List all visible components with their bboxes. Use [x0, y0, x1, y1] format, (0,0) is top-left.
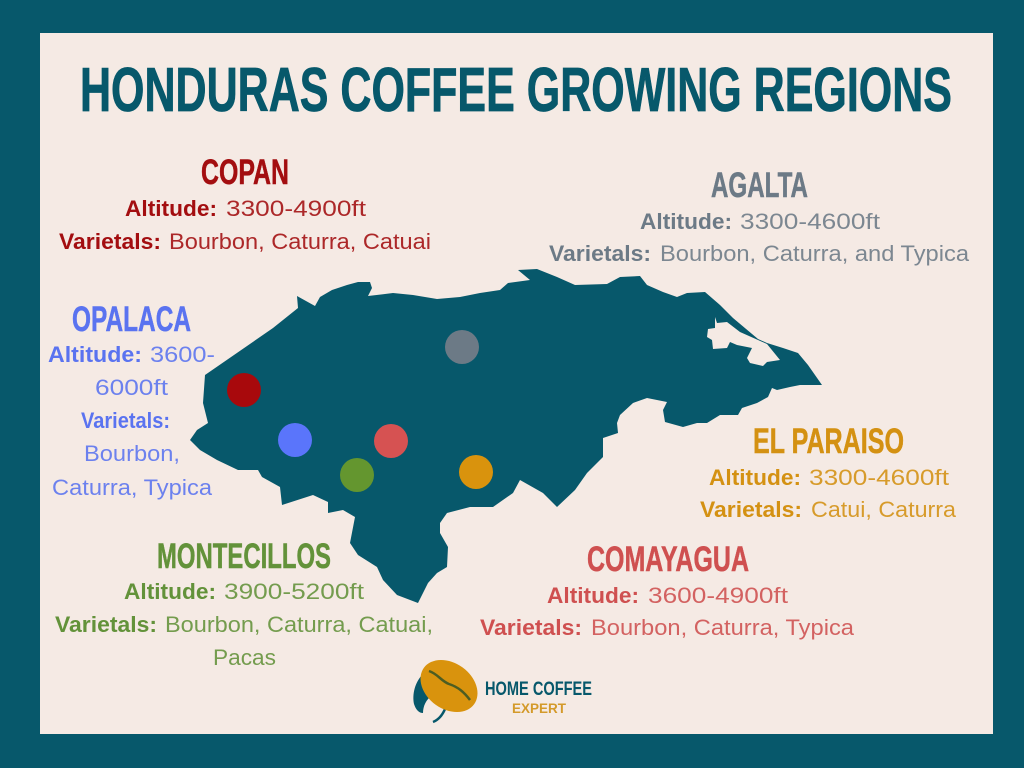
- region: Comayagua: COMAYAGUA: [587, 540, 749, 579]
- region: Montecillos: 3900-5200ft: [224, 579, 365, 604]
- logo wordmark: HOME COFFEE: [485, 679, 592, 700]
- region: Montecillos: Bourbon, Caturra, Catuai,: [165, 612, 433, 637]
- region: Opalaca: Varietals:: [81, 408, 170, 433]
- region: El Paraiso: 3300-4600ft: [809, 465, 950, 490]
- marker: Comayagua: [374, 424, 408, 458]
- marker: El Paraiso: [459, 455, 493, 489]
- region: Montecillos: Pacas: [213, 645, 276, 670]
- marker: Agalta: [445, 330, 479, 364]
- region: Opalaca: [48, 300, 215, 500]
- region: Opalaca: Caturra, Typica: [52, 475, 213, 500]
- region: Montecillos: Varietals:: [55, 612, 157, 637]
- region: El Paraiso: Varietals:: [700, 497, 802, 522]
- region: Agalta: Varietals:: [549, 241, 651, 266]
- region: Agalta: Altitude:: [640, 209, 732, 234]
- region: Montecillos: MONTECILLOS: [157, 537, 331, 576]
- region: Copan: 3300-4900ft: [226, 196, 367, 221]
- region: Copan: Bourbon, Caturra, Catuai: [169, 229, 431, 254]
- region: Opalaca: OPALACA: [72, 300, 191, 339]
- region: El Paraiso: Catui, Caturra: [811, 497, 956, 522]
- marker: Montecillos: [340, 458, 374, 492]
- region: Agalta: Bourbon, Caturra, and Typica: [660, 241, 970, 266]
- region: Agalta: [549, 166, 970, 266]
- region: Agalta: AGALTA: [711, 166, 808, 205]
- region: Montecillos: Altitude:: [124, 579, 216, 604]
- region: Opalaca: 3600-: [150, 342, 215, 367]
- region: Opalaca: Altitude:: [48, 342, 142, 367]
- logo tagline: EXPERT: [512, 701, 567, 716]
- region: Comayagua: Altitude:: [547, 583, 639, 608]
- marker: Opalaca: [278, 423, 312, 457]
- region: Comayagua: Varietals:: [480, 615, 582, 640]
- region: Comayagua: [480, 540, 854, 640]
- icon: coffee bean: [410, 649, 488, 723]
- region: El Paraiso: Altitude:: [709, 465, 801, 490]
- region: El Paraiso: EL PARAISO: [753, 422, 904, 461]
- region: Comayagua: 3600-4900ft: [648, 583, 789, 608]
- region: El Paraiso: [700, 422, 956, 522]
- region: Agalta: 3300-4600ft: [740, 209, 881, 234]
- map: Honduras silhouette with region markers: [190, 269, 822, 603]
- region: Copan: [59, 153, 431, 254]
- region: Copan: COPAN: [201, 153, 289, 192]
- logo: Home Coffee Expert: [410, 649, 592, 723]
- region: Opalaca: 6000ft: [95, 375, 169, 400]
- region: Montecillos: [55, 537, 433, 670]
- region: Copan: Altitude:: [125, 196, 217, 221]
- region: Comayagua: Bourbon, Caturra, Typica: [591, 615, 854, 640]
- region: Opalaca: Bourbon,: [84, 441, 180, 466]
- region: Copan: Varietals:: [59, 229, 161, 254]
- marker: Copan: [227, 373, 261, 407]
